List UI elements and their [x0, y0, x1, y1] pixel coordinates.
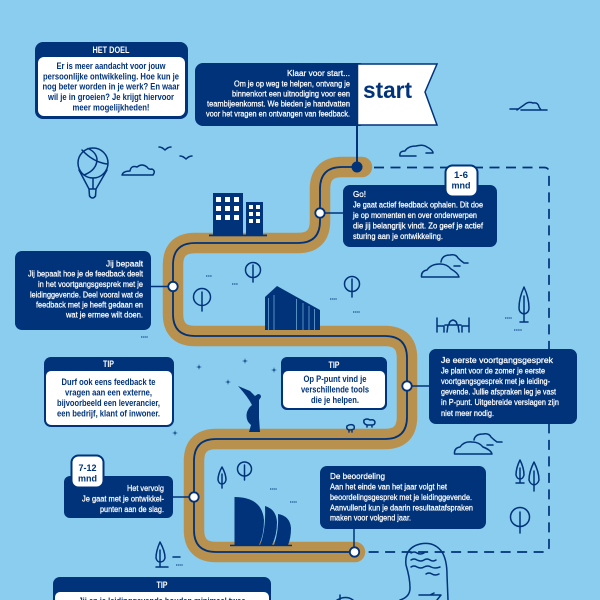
- gold road: [173, 167, 407, 552]
- route line: [173, 167, 407, 552]
- panel: tip centre: die je helpen.: [311, 394, 359, 405]
- dashed return route: [367, 168, 549, 552]
- panel: eerste voortgangsgesprek: Je eerste voortgangsgesprek: [441, 355, 554, 365]
- badge: 1-6 mnd: mnd: [452, 180, 471, 190]
- icon: cloud lower right: [454, 434, 502, 454]
- icon: cloud top right: [510, 102, 547, 110]
- icon: cloud right: [421, 255, 468, 277]
- panel: eerste voortgangsgesprek: [429, 349, 577, 424]
- panel: klaar voor start: Klaar voor start...: [287, 68, 350, 78]
- panel: tip left: [44, 357, 174, 427]
- panel: jij bepaalt: Jij bepaalt: [106, 259, 144, 269]
- panel: go: [343, 185, 497, 247]
- panel: tip left: Durf ook eens feedback te: [62, 376, 156, 387]
- panel: de beoordeling: De beoordeling: [330, 471, 385, 481]
- panel: de beoordeling: maken voor volgend jaar.: [330, 512, 411, 522]
- flag: start: start: [363, 77, 412, 103]
- start pole and marker: [352, 125, 362, 172]
- icon: sheep: [347, 419, 375, 432]
- icon: buildings: [209, 193, 267, 236]
- panel: tip bottom: [53, 577, 271, 600]
- panel: tip centre: [281, 357, 387, 410]
- panel: go: Go!: [353, 189, 366, 199]
- icon: water and boats: [337, 543, 448, 600]
- icon: birds: [159, 147, 192, 159]
- icon: statue: [238, 386, 261, 432]
- panel: het vervolg: [64, 476, 173, 518]
- panel: eerste voortgangsgesprek: gevende. Jullie afspraken leg je vast: [441, 386, 557, 396]
- panel: jij bepaalt: [15, 251, 151, 330]
- panel: jij bepaalt: feedback met je heeft gedaan en: [36, 300, 143, 310]
- panel: klaar voor start: Om je op weg te helpen, ontvang je: [234, 78, 350, 88]
- icon: cloud above road: [400, 145, 433, 156]
- panel: go: je op momenten en over onderwerpen: [352, 210, 477, 220]
- connector lines: [151, 213, 429, 552]
- panel: jij bepaalt: wat je ermee wilt doen.: [65, 310, 143, 320]
- panel: het vervolg: Het vervolg: [127, 483, 164, 493]
- panel: eerste voortgangsgesprek: Je plant voor de zomer je eerste: [441, 366, 545, 376]
- panel: jij bepaalt: in het voortgangsgesprek met je: [38, 279, 143, 289]
- badge: 7-12 mnd: 7-12: [78, 462, 96, 473]
- badge: 1-6 mnd: 1-6: [454, 169, 468, 180]
- panel: tip centre: TIP: [328, 360, 340, 371]
- icon: barn: [265, 286, 320, 330]
- panel: tip bottom: TIP: [156, 580, 168, 591]
- panel: het doel: persoonlijke ontwikkeling. Hoe kun je: [43, 70, 179, 82]
- panel: eerste voortgangsgesprek: niet meer nodig.: [441, 408, 494, 418]
- badge: 1-6 mnd: [446, 166, 478, 196]
- icon: cloud: [122, 165, 154, 175]
- panel: het doel: wil je in groeien? Je krijgt hiervoor: [47, 91, 174, 102]
- panel: go: die jij belangrijk vindt. Zo geef je actief: [353, 220, 484, 230]
- icon: grass tufts: [141, 276, 522, 565]
- flag: start: [358, 64, 437, 125]
- panel: tip centre: verschillende tools: [301, 384, 369, 395]
- panel: de beoordeling: [320, 466, 486, 529]
- panel: go: sturing aan je ontwikkeling.: [353, 231, 443, 241]
- icon: picnic table: [437, 318, 469, 332]
- panel: jij bepaalt: leidinggevende. Deel vooral wat de: [30, 289, 143, 299]
- panel: het doel: nog beter worden in je werk? En waar: [42, 81, 180, 92]
- panel: tip left: vragen aan een externe,: [65, 386, 152, 398]
- panel: het vervolg: Je gaat met je ontwikkel-: [82, 494, 164, 504]
- panel: klaar voor start: [195, 63, 367, 126]
- panel: de beoordeling: beoordelingsgesprek met je leidinggevende.: [330, 492, 472, 502]
- icon: sparkles: [172, 358, 277, 436]
- panel: go: Je gaat actief feedback ophalen. Dit doe: [353, 200, 483, 210]
- panel: klaar voor start: binnenkort een uitnodiging voor een: [232, 89, 350, 99]
- panel: het doel: [35, 42, 188, 119]
- panel: tip left: TIP: [103, 359, 114, 370]
- panel: het doel: Er is meer aandacht voor jouw: [56, 60, 166, 71]
- panel: tip left: bijvoorbeeld een leverancier,: [57, 397, 160, 408]
- panel: klaar voor start: voor het vragen en ontvangen van feedback.: [206, 109, 350, 119]
- icon: trees and grass middle: [194, 262, 529, 322]
- panel: het doel: meer mogelijkheden!: [72, 101, 150, 112]
- badge: 7-12 mnd: mnd: [78, 472, 97, 484]
- panel: tip left: een bedrijf, klant of inwoner.: [57, 408, 160, 418]
- icon: opera building: [230, 497, 292, 546]
- panel: het vervolg: punten aan de slag.: [100, 504, 164, 514]
- panel: eerste voortgangsgesprek: voortgangsgesprek met je leiding-: [441, 376, 550, 386]
- icon: hot air balloon: [78, 148, 108, 198]
- panel: het doel: HET DOEL: [92, 45, 130, 56]
- badge: 7-12 mnd: [72, 456, 104, 488]
- panel: de beoordeling: Aan het einde van het jaar volgt het: [330, 482, 448, 492]
- panel: de beoordeling: Aanvullend kun je daarin resultaatafspraken: [330, 502, 473, 512]
- icon: trees lower: [156, 460, 539, 567]
- panel: eerste voortgangsgesprek: in P-punt. Uitgebreide verslagen zijn: [441, 397, 559, 407]
- panel: klaar voor start: teambijeenkomst. We bieden je handvatten: [207, 98, 350, 108]
- panel: tip centre: Op P-punt vind je: [304, 373, 366, 384]
- panel: jij bepaalt: Jij bepaalt hoe je de feedback deelt: [28, 269, 144, 279]
- route markers: [168, 208, 412, 557]
